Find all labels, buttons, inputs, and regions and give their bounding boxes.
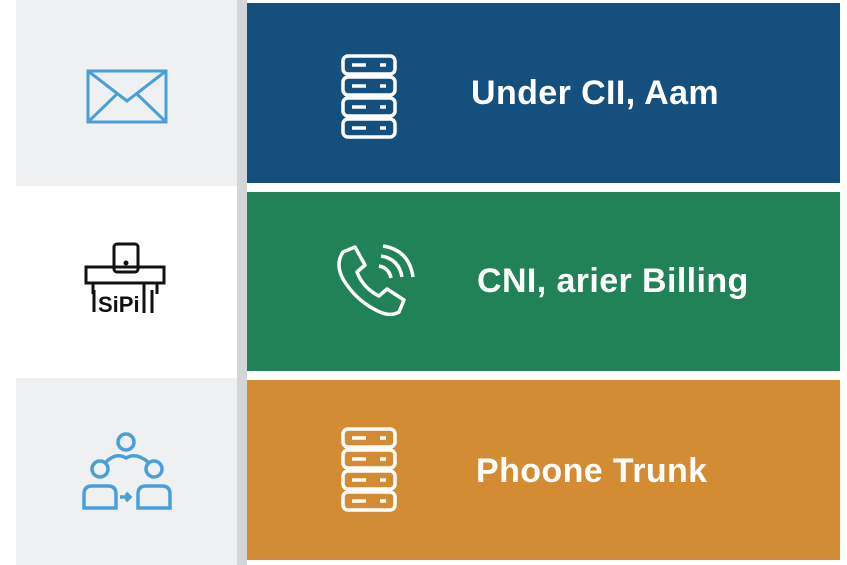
icon: SIP desk: SiPi: [98, 292, 140, 317]
icon: phone: [337, 244, 415, 316]
icon: envelope: [86, 70, 168, 124]
icon: SIP desk: [84, 242, 166, 317]
icon: server: [341, 54, 397, 139]
band: orange: [247, 380, 840, 560]
left panel: email: [16, 0, 237, 186]
text: Under CII, Aam: [471, 74, 719, 112]
icon: people network: [82, 432, 172, 510]
divider: [237, 0, 247, 565]
text: Phoone Trunk: [476, 452, 707, 490]
left panel: people: [16, 378, 237, 565]
band: green: [247, 192, 840, 371]
icon: server: [341, 427, 397, 512]
left panel: SIP: [16, 186, 237, 378]
text: CNI, arier Billing: [477, 262, 749, 300]
band: blue: [247, 3, 840, 183]
